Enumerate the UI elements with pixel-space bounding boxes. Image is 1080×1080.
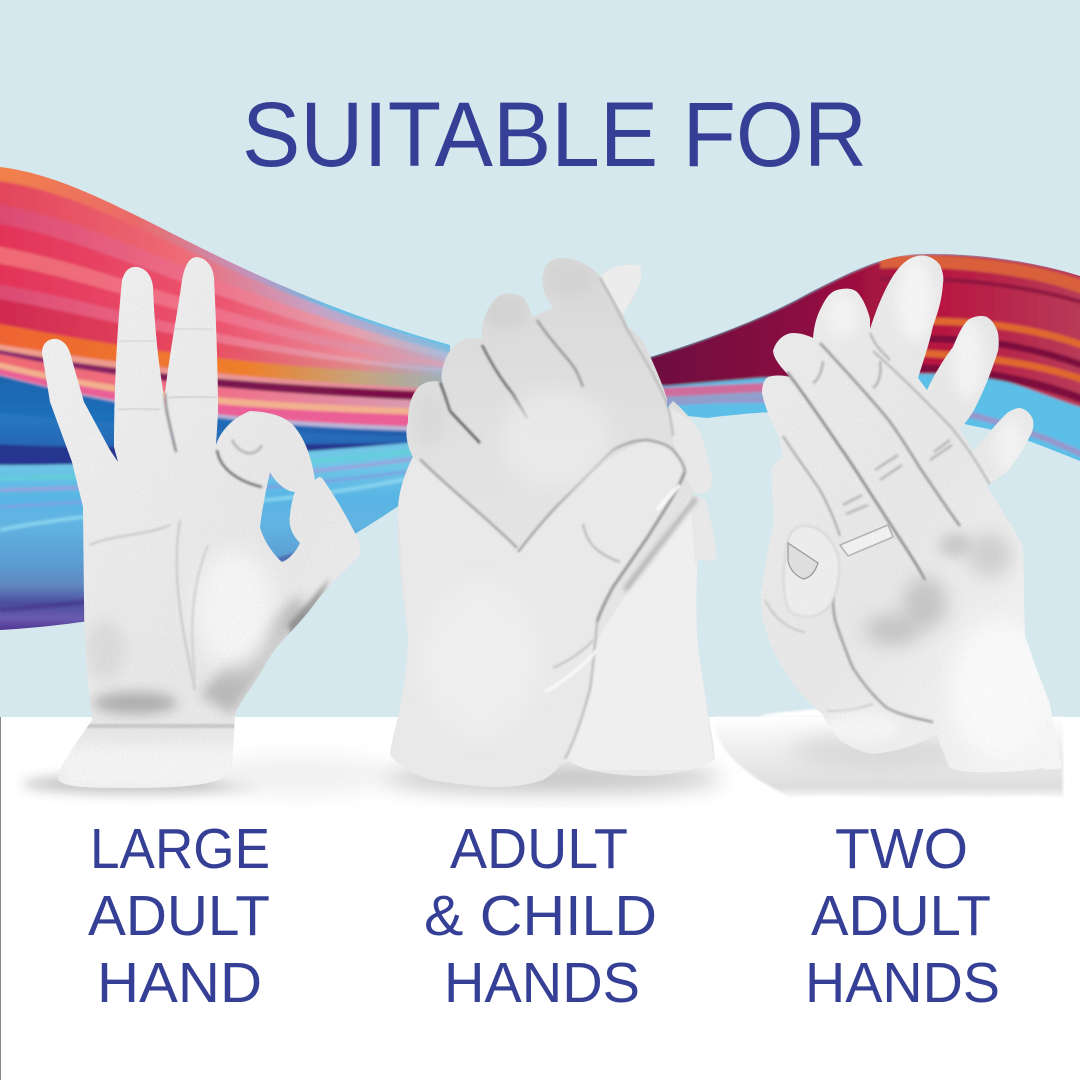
- label: adult and child hands: & CHILD: [424, 884, 657, 948]
- thumb: [784, 526, 839, 617]
- label: large adult hand: ADULT: [88, 884, 270, 948]
- hand: adult and child: [385, 255, 725, 790]
- label: two adult hands: ADULT: [811, 884, 991, 948]
- label: large adult hand: LARGE: [90, 817, 270, 881]
- right colour ribbon: [640, 250, 1080, 470]
- ground: white base: [0, 717, 1080, 1080]
- hand: large adult OK gesture: [30, 250, 370, 795]
- label: two adult hands: HANDS: [805, 951, 1000, 1015]
- thumb nail: [788, 543, 818, 579]
- hand: two adult hands: [755, 250, 1065, 780]
- front hand palm: [399, 443, 658, 498]
- label: two adult hands: TWO: [835, 817, 968, 881]
- left colour ribbon: [0, 160, 460, 650]
- ring: [840, 525, 893, 556]
- label: large adult hand: [88, 817, 270, 1015]
- label: adult and child hands: ADULT: [450, 817, 628, 881]
- left edge line: [0, 717, 1, 1080]
- knuckle creases: [843, 440, 952, 514]
- label: adult and child hands: [424, 817, 657, 1015]
- child fingers behind: [600, 264, 641, 314]
- background: pale blue sky: [0, 0, 1080, 718]
- label: adult and child hands: HANDS: [444, 951, 640, 1015]
- ground haze and shadows: [22, 706, 1063, 798]
- child hand creases: [420, 278, 696, 759]
- label: large adult hand: HAND: [97, 951, 262, 1015]
- rear finger highlights: [826, 258, 1024, 471]
- front finger separations: [765, 333, 1010, 722]
- title: SUITABLE FOR: [242, 84, 867, 186]
- label: two adult hands: [805, 817, 1000, 1015]
- rear wrist: [584, 496, 704, 770]
- hand 1 palm shading: [60, 328, 330, 790]
